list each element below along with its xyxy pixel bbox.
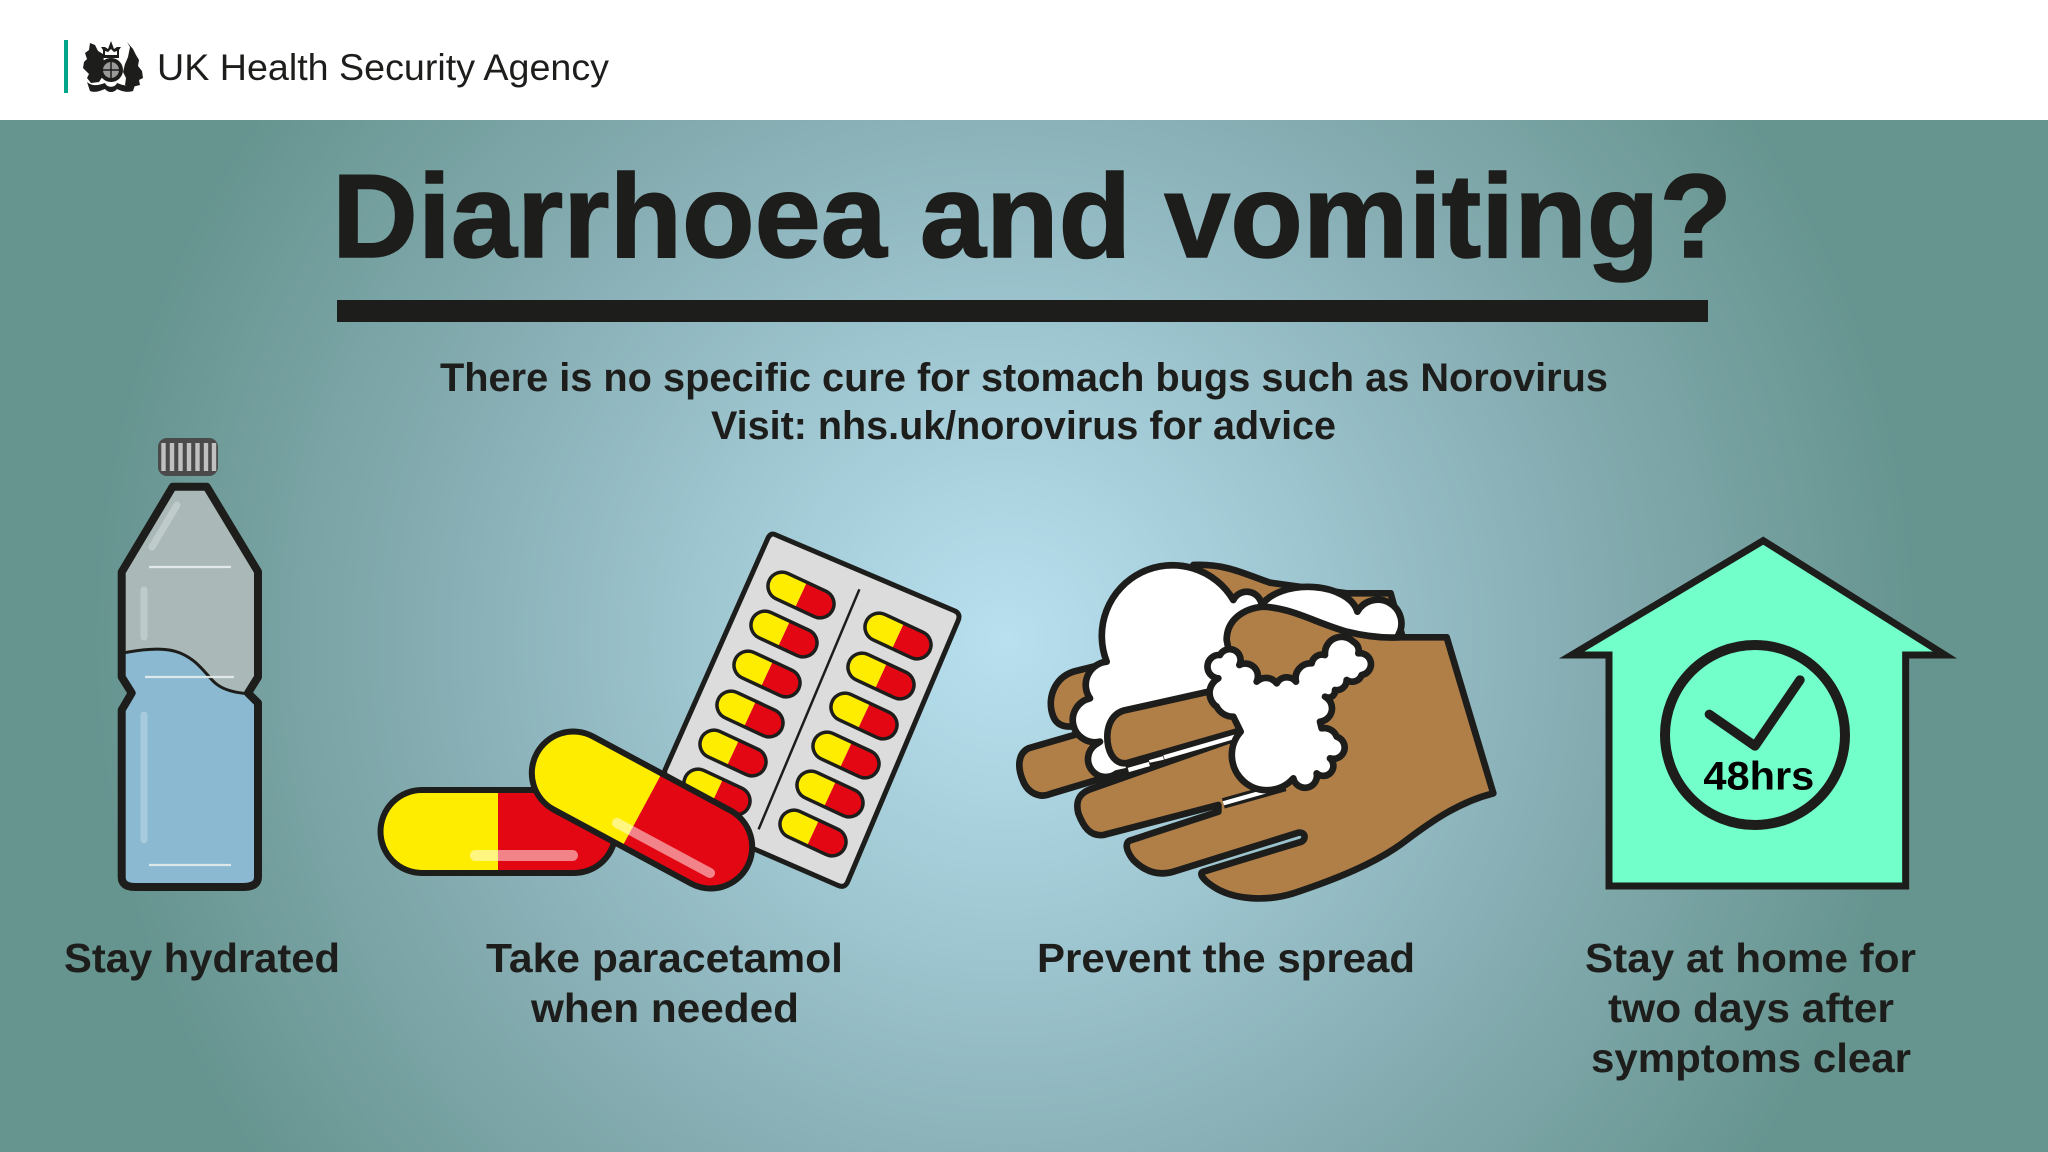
subtitle text: Visit: nhs.uk/norovirus for advice xyxy=(711,404,1336,448)
clock check mark hands xyxy=(1709,680,1800,746)
horizontal capsule xyxy=(380,790,616,873)
label: take paracetamol: Take paracetamol xyxy=(486,935,843,981)
label: stay at home: two days after xyxy=(1608,985,1894,1031)
blister pack xyxy=(660,534,959,886)
back fingers xyxy=(1019,665,1113,796)
icon: blister pack and capsules xyxy=(380,534,959,903)
front hand xyxy=(1077,607,1493,898)
title: Diarrhoea and vomiting? xyxy=(332,150,1732,283)
icon: water bottle xyxy=(122,438,258,887)
bottle cap xyxy=(158,438,218,476)
label: prevent the spread: Prevent the spread xyxy=(1037,935,1415,981)
subtitle text xyxy=(440,356,1608,448)
icon: royal crest xyxy=(83,41,143,92)
house shape xyxy=(1572,541,1945,886)
icon: hands washing with soap xyxy=(1019,565,1493,898)
subtitle text: There is no specific cure for stomach bugs such as Norovirus xyxy=(440,356,1608,400)
icon: house with 48hrs clock xyxy=(1572,541,1945,886)
water xyxy=(122,648,258,887)
label: take paracetamol: when needed xyxy=(530,985,799,1031)
clock face xyxy=(1665,645,1845,825)
header logo: UK Health Security Agency xyxy=(64,40,610,93)
label: stay at home xyxy=(1585,935,1916,1081)
foam on back hand xyxy=(1073,565,1401,777)
label: stay at home: symptoms clear xyxy=(1591,1035,1911,1081)
bottle body xyxy=(122,487,258,887)
back hand xyxy=(1193,565,1403,640)
angled capsule xyxy=(517,717,767,903)
title rule xyxy=(337,300,1708,322)
clock text: 48hrs xyxy=(1703,754,1814,798)
upper front finger xyxy=(1107,682,1253,763)
logo wordmark: UK Health Security Agency xyxy=(157,47,610,88)
label: stay hydrated: Stay hydrated xyxy=(64,935,340,981)
white gaps between fingers xyxy=(1127,737,1285,803)
label: stay at home: Stay at home for xyxy=(1585,935,1916,981)
foam on front hand xyxy=(1207,637,1371,790)
label: take paracetamol xyxy=(486,935,843,1031)
